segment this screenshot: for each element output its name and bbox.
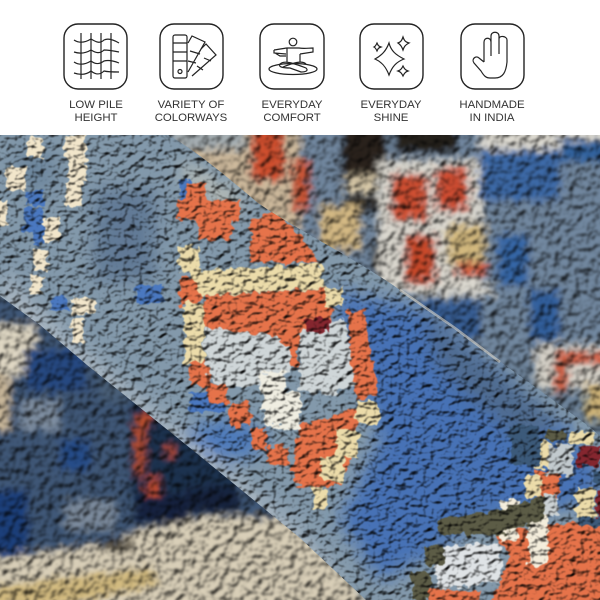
label: handmade in india: IN INDIA [470, 112, 515, 124]
icon: everyday shine [360, 24, 423, 89]
coloured motif [0, 135, 600, 600]
blue field [0, 150, 600, 590]
label: variety of colorways: VARIETY OF [158, 99, 224, 111]
icon: variety of colorways [160, 24, 223, 89]
icon: low pile height [64, 24, 127, 89]
icon: handmade in india [461, 24, 524, 89]
roll rim highlight [400, 290, 500, 362]
label: handmade in india: HANDMADE [459, 99, 525, 111]
icon: everyday comfort [260, 24, 324, 89]
rug field, lower left [0, 296, 380, 600]
label: everyday shine: SHINE [374, 112, 409, 124]
rug medallion, upper right [170, 125, 600, 420]
label: everyday shine: EVERYDAY [360, 99, 422, 111]
label: everyday comfort: COMFORT [263, 112, 321, 124]
label: variety of colorways: COLORWAYS [155, 112, 228, 124]
label: low pile height: HEIGHT [74, 112, 118, 124]
label: low pile height: LOW PILE [69, 99, 123, 111]
label: everyday comfort: EVERYDAY [262, 99, 323, 111]
